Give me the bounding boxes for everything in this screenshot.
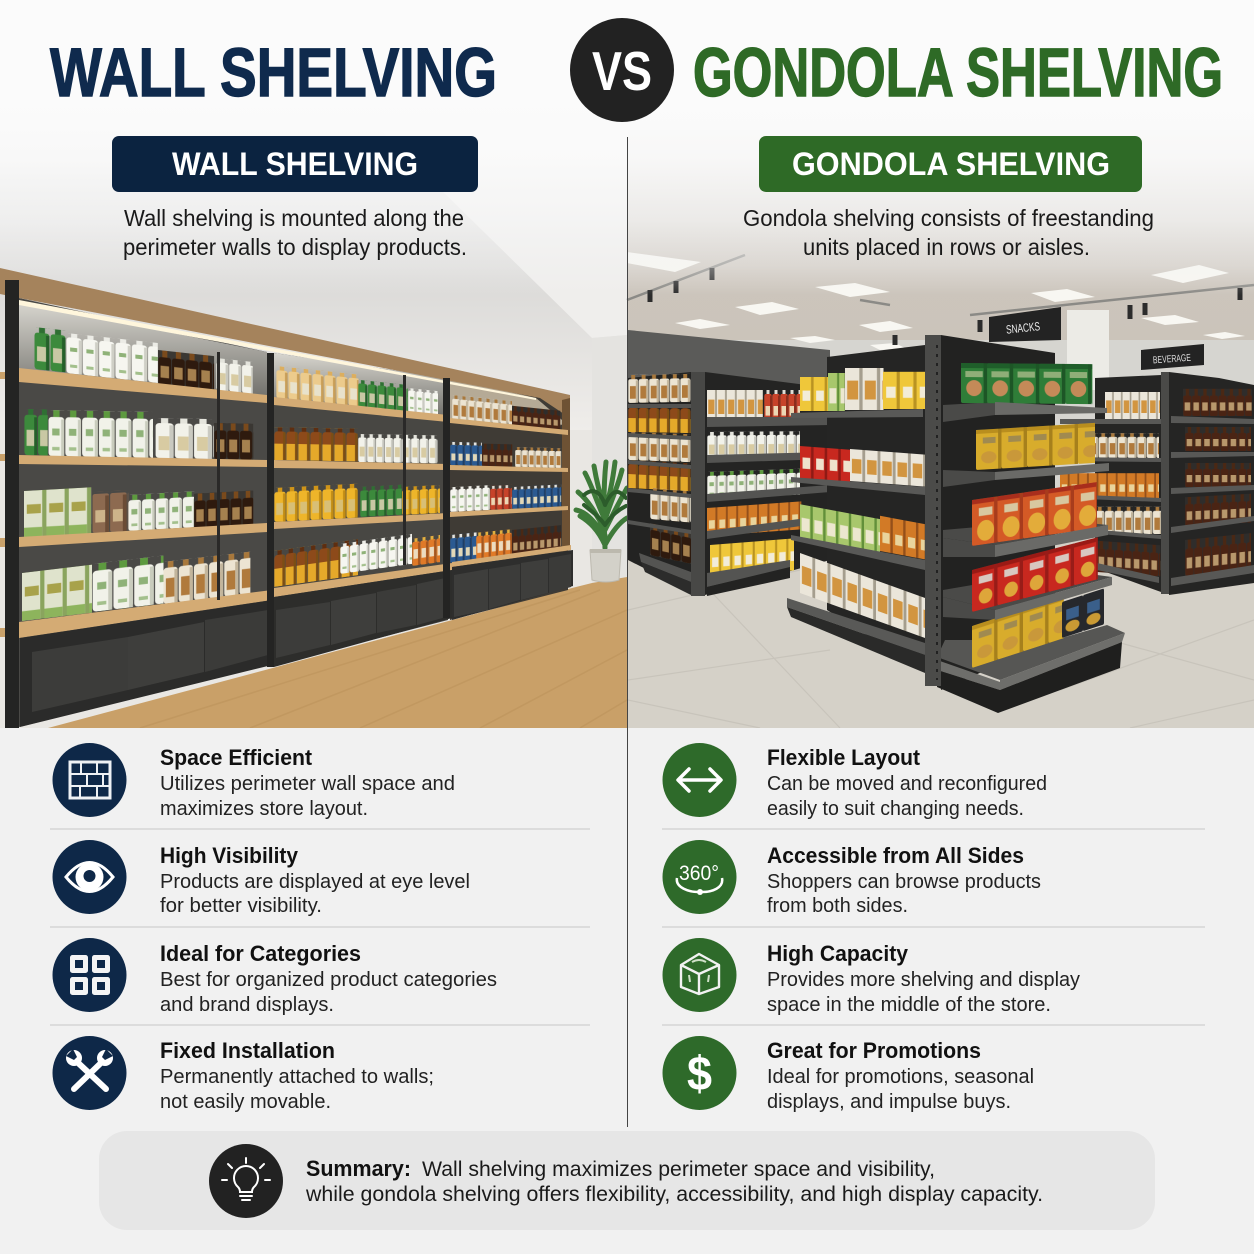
- description: gondola shelving: units placed in rows or aisles.: [803, 234, 1090, 260]
- icon: box: [662, 938, 736, 1012]
- icon: category grid: [52, 938, 126, 1012]
- feature: great for promotions: Great for Promotions: [767, 1038, 981, 1063]
- description: wall shelving: Wall shelving is mounted along the: [124, 205, 464, 231]
- photo: wall shelving store scene: [0, 268, 627, 728]
- feature: space efficient: Space Efficient: [160, 745, 313, 770]
- left background gondola: [628, 372, 830, 596]
- right face panel: [941, 335, 1055, 690]
- right face shelf surfaces: [943, 402, 1112, 620]
- photo: gondola shelving store scene: [628, 307, 1254, 713]
- feature: great for promotions: [662, 1036, 1034, 1113]
- left face products: [800, 368, 925, 638]
- vs badge: [570, 18, 674, 122]
- feature: accessible from all sides: [662, 840, 1041, 917]
- description: gondola shelving: [743, 205, 1154, 260]
- feature: ideal for categories: [52, 938, 497, 1016]
- sign: beverage: BEVERAGE: [1153, 353, 1192, 366]
- potted plant: [576, 462, 627, 582]
- icon: 360 degrees: 360°: [679, 862, 719, 885]
- feature: high visibility: for better visibility.: [160, 895, 322, 917]
- feature: fixed installation: Fixed Installation: [160, 1038, 335, 1063]
- description: wall shelving: perimeter walls to display products.: [123, 234, 467, 260]
- icon: dollar sign: [662, 1036, 736, 1110]
- feature: ideal for categories: Ideal for Categories: [160, 941, 361, 966]
- feature: accessible from all sides: from both sides.: [767, 895, 908, 917]
- side stubs: [0, 372, 6, 637]
- feature: high capacity: Provides more shelving and display: [767, 969, 1080, 991]
- feature: fixed installation: not easily movable.: [160, 1091, 331, 1113]
- shelving back panels: [19, 298, 568, 727]
- title: wall shelving: WALL SHELVING: [50, 34, 497, 111]
- top fade over photos: [0, 100, 1254, 295]
- shelf products bay 1: [22, 327, 253, 621]
- right face products: [961, 363, 1104, 668]
- feature: space efficient: [52, 743, 455, 820]
- dividers: [50, 829, 1205, 1025]
- feature: flexible layout: easily to suit changing needs.: [767, 798, 1024, 820]
- icon: double arrow: [662, 743, 736, 817]
- photo backdrop: walls, ceiling, floor: [0, 100, 1254, 728]
- feature: flexible layout: Flexible Layout: [767, 745, 921, 770]
- base cabinets: [20, 550, 573, 727]
- wood header: [0, 268, 570, 418]
- left face panel: [827, 345, 925, 672]
- feature: fixed installation: Permanently attached to walls;: [160, 1066, 434, 1088]
- lower panel background: [0, 728, 1254, 1254]
- right face base: [937, 625, 1125, 680]
- feature: high visibility: High Visibility: [160, 843, 299, 868]
- sign: beverage: [1141, 344, 1204, 370]
- summary panel: while gondola shelving offers flexibility, accessibility, and high display capacity.: [305, 1182, 1043, 1206]
- feature: flexible layout: [662, 743, 1047, 820]
- main gondola unit: [787, 335, 1125, 713]
- wooden shelves: [19, 368, 571, 638]
- feature: space efficient: maximizes store layout.: [160, 798, 368, 820]
- feature: ideal for categories: Best for organized product categories: [160, 969, 497, 991]
- vs badge: VS: [592, 40, 652, 102]
- feature: high visibility: Products are displayed at eye level: [160, 871, 470, 893]
- feature: accessible from all sides: Accessible from All Sides: [767, 843, 1024, 868]
- icon: light bulb: [209, 1144, 283, 1218]
- feature: accessible from all sides: Shoppers can browse products: [767, 871, 1041, 893]
- central post: [925, 335, 941, 686]
- feature: great for promotions: Ideal for promotions, seasonal: [767, 1066, 1034, 1088]
- feature: high visibility: [52, 840, 470, 917]
- description: gondola shelving: Gondola shelving consists of freestanding: [743, 205, 1154, 231]
- heading badge: wall shelving: [112, 136, 478, 192]
- icon: 360 degrees: [662, 840, 736, 914]
- icon: brick wall: [52, 743, 126, 817]
- description: wall shelving: [123, 205, 467, 260]
- feature: high capacity: High Capacity: [767, 941, 909, 966]
- feature: high capacity: [662, 938, 1080, 1016]
- icon: wrench and screwdriver: [52, 1036, 126, 1110]
- sign: snacks: SNACKS: [1005, 319, 1041, 337]
- right face shelf fronts: [995, 402, 1112, 620]
- heading badge: wall shelving: WALL SHELVING: [172, 146, 418, 182]
- feature: space efficient: Utilizes perimeter wall space and: [160, 773, 455, 795]
- left face shelves: [787, 409, 925, 655]
- sign: snacks: [989, 307, 1061, 342]
- icon: eye: [52, 840, 126, 914]
- heading badge: gondola shelving: GONDOLA SHELVING: [792, 146, 1110, 182]
- feature: fixed installation: [52, 1036, 434, 1113]
- center divider: [627, 137, 628, 1127]
- right background gondola: [1060, 372, 1254, 595]
- summary panel: Wall shelving maximizes perimeter space and visibility,: [422, 1157, 935, 1181]
- shelf products bay 2: [274, 366, 440, 587]
- feature: ideal for categories: and brand displays.: [160, 994, 334, 1016]
- heading badge: gondola shelving: [759, 136, 1142, 192]
- feature: flexible layout: Can be moved and reconfigured: [767, 773, 1047, 795]
- summary panel: Summary:: [306, 1156, 411, 1181]
- metal uprights: [5, 280, 450, 728]
- shelf products bay 3: [450, 395, 561, 563]
- feature: great for promotions: displays, and impulse buys.: [767, 1091, 1011, 1113]
- summary panel: [99, 1131, 1155, 1230]
- icon: dollar sign: $: [687, 1048, 712, 1101]
- feature: high capacity: space in the middle of the store.: [767, 994, 1051, 1016]
